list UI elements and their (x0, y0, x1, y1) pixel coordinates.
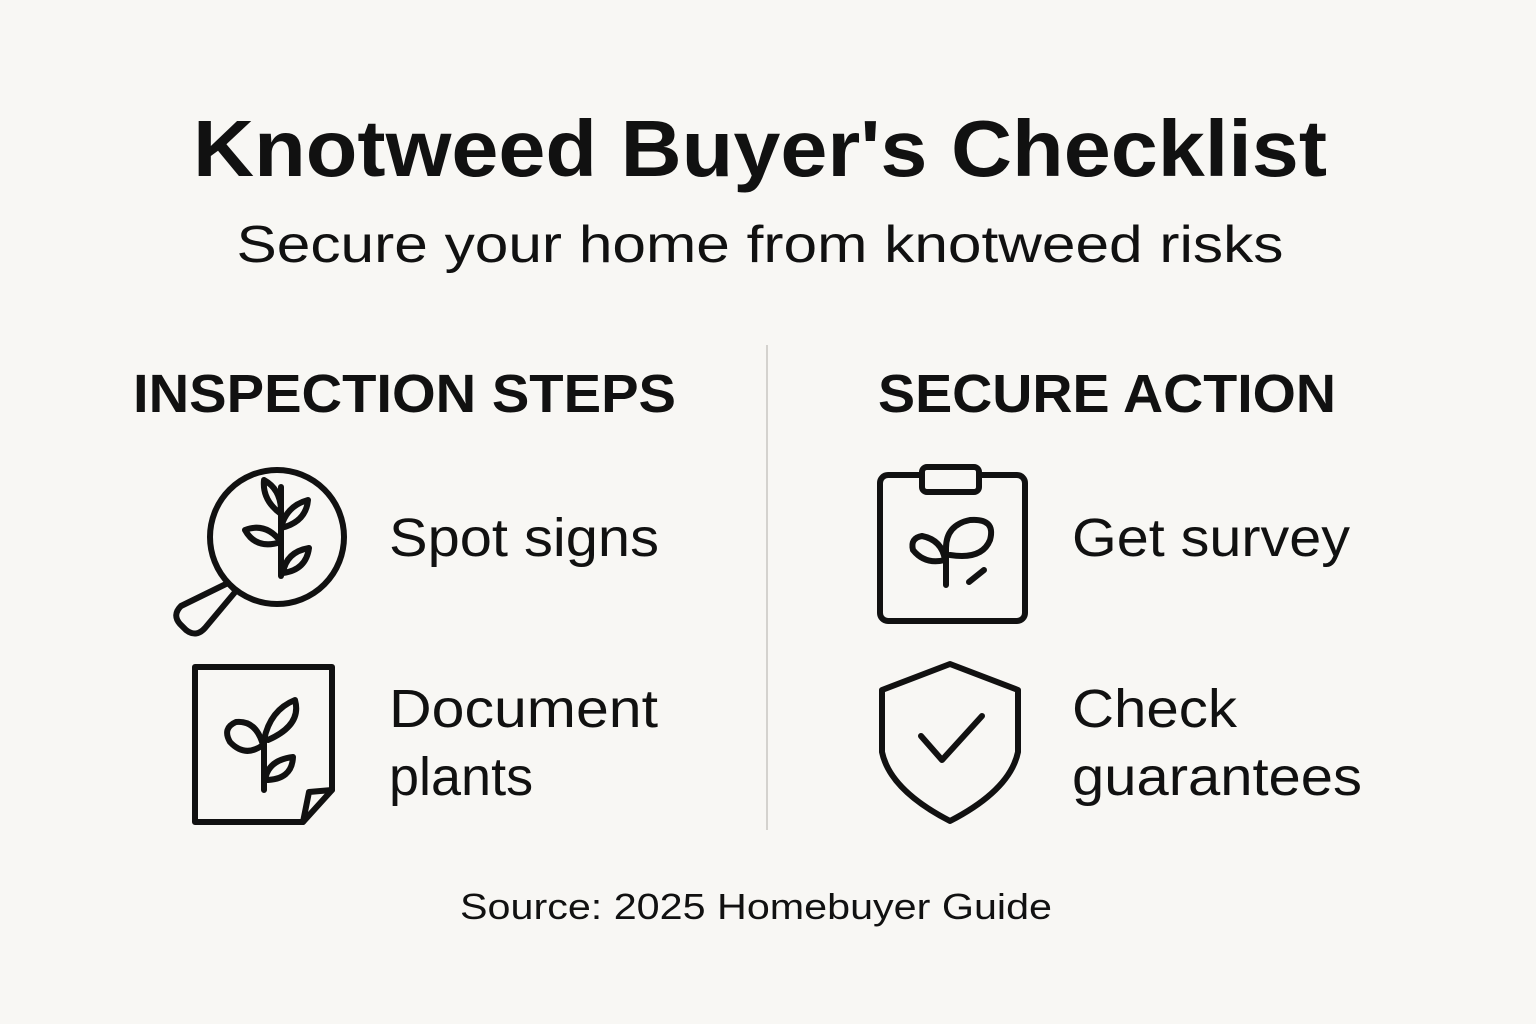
icon: magnifier with plant (176, 470, 344, 634)
text: document plants: plants (389, 747, 533, 807)
text: get survey: Get survey (1072, 508, 1350, 568)
panel: secure action (878, 364, 1362, 821)
text: spot signs: Spot signs (389, 508, 659, 568)
text: document plants: Document (389, 679, 658, 739)
icon: document with plant (195, 667, 332, 822)
title: Knotweed Buyer's Checklist (193, 104, 1327, 193)
panel: inspection steps (133, 364, 676, 822)
heading: inspection steps: INSPECTION STEPS (133, 364, 676, 424)
subtitle: Secure your home from knotweed risks (236, 216, 1284, 274)
text: check guarantees: Check (1072, 679, 1238, 739)
heading: secure action: SECURE ACTION (878, 364, 1336, 424)
icon: clipboard with plant (880, 467, 1025, 621)
text: check guarantees: guarantees (1072, 747, 1362, 807)
icon: shield with check (882, 664, 1018, 821)
source note: Source: 2025 Homebuyer Guide (460, 886, 1052, 927)
